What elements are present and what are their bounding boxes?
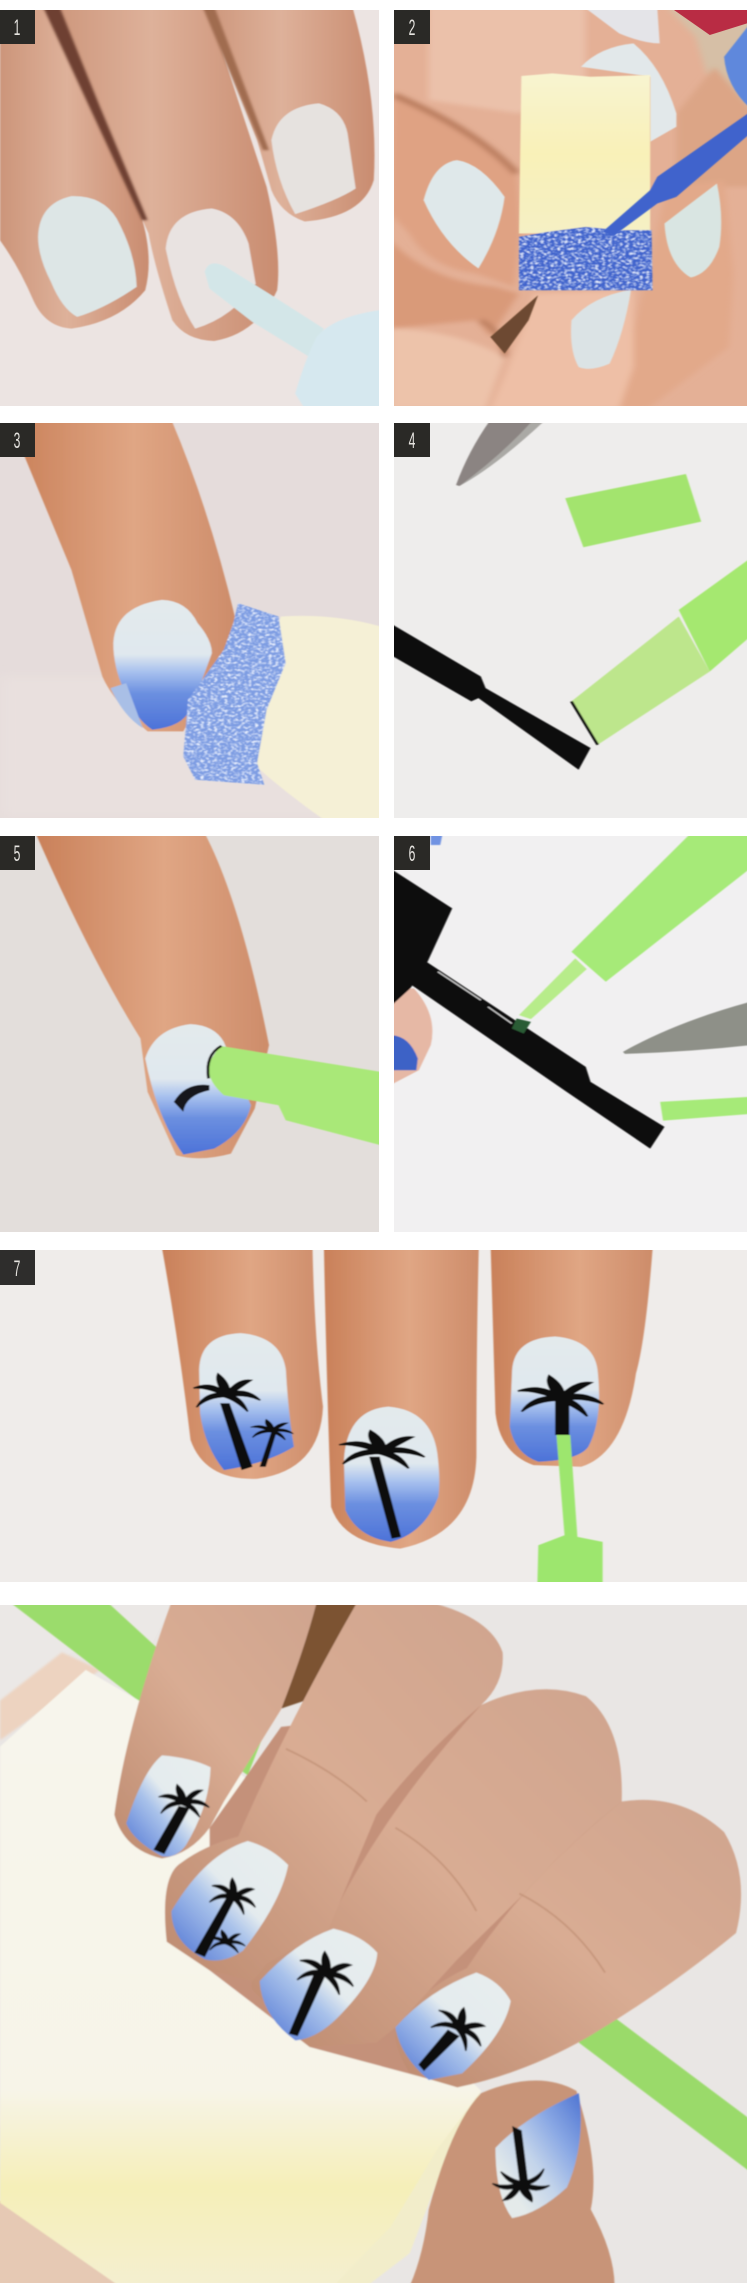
finger creases — [286, 1749, 605, 1973]
badge: 7: 7 — [14, 1256, 20, 1281]
finger: pinky — [114, 1602, 317, 1858]
badge: 6: 6 — [409, 841, 415, 866]
finger — [36, 833, 269, 1158]
ring — [279, 1602, 362, 1709]
badge: 1 — [0, 10, 35, 44]
badge: 5: 5 — [14, 841, 20, 866]
polish mark — [174, 1085, 209, 1112]
nail: right — [271, 103, 356, 214]
nail: thumb with palm — [490, 2093, 581, 2218]
nails — [424, 8, 721, 369]
finger: left — [162, 1248, 323, 1479]
badge: 3 — [0, 423, 35, 457]
nail: pinky with palm — [126, 1755, 211, 1857]
thumb — [410, 2080, 615, 2283]
badge: 7 — [0, 1250, 35, 1285]
nail: index with palm — [395, 1973, 511, 2080]
sponge — [183, 603, 381, 820]
brush: blue polish — [602, 23, 747, 235]
straw cut piece — [660, 1097, 747, 1121]
badge: 2: 2 — [409, 15, 415, 40]
sponge — [0, 1670, 481, 2283]
nail: middle — [166, 209, 256, 329]
panel: step 1 — [0, 7, 381, 409]
straw — [571, 558, 747, 745]
black bottle — [390, 868, 452, 1007]
badge: 5 — [0, 836, 35, 870]
finger: middle — [324, 1248, 479, 1549]
nail: ombre — [145, 1024, 251, 1155]
panel: step 4 — [390, 420, 747, 818]
scissors — [456, 420, 545, 486]
nail: middle with palm — [339, 1407, 439, 1542]
green stick — [537, 1435, 603, 1584]
badge: 3: 3 — [14, 428, 20, 453]
nail: left — [38, 196, 137, 317]
finger — [10, 420, 236, 731]
straw — [519, 833, 747, 1019]
ring — [490, 295, 538, 354]
panel: step 6 — [390, 833, 747, 1232]
badge: 2 — [394, 10, 430, 44]
nail: left with palms — [194, 1333, 294, 1470]
finger: middle — [165, 1602, 503, 1981]
straw: lower — [579, 2003, 747, 2172]
brush: pale polish — [205, 263, 381, 409]
hand: palm behind the fingers — [210, 1705, 622, 2087]
panel: step 7 — [0, 1248, 747, 1584]
straw piece — [565, 474, 701, 547]
panel: final result — [0, 1602, 747, 2283]
finger: right — [491, 1248, 653, 1467]
nail: ombre — [113, 600, 212, 730]
badge: 1: 1 — [14, 15, 20, 40]
panel: step 2 — [390, 7, 747, 409]
black brush — [390, 623, 591, 770]
finger: ring — [252, 1689, 622, 2047]
panel: step 5 — [0, 833, 381, 1232]
panel: step 3 — [0, 420, 381, 820]
nail: right with palm — [510, 1337, 603, 1462]
badge: 4: 4 — [409, 428, 415, 453]
straw: upper — [10, 1602, 267, 1775]
sponge — [519, 73, 653, 290]
black brush — [404, 957, 664, 1149]
nail: ring with palms — [172, 1841, 288, 1960]
badge: 4 — [394, 423, 430, 457]
scissors — [623, 1002, 747, 1054]
nail: middle with palm — [260, 1929, 377, 2040]
finger: little — [394, 1800, 741, 2087]
finger and nail — [390, 833, 443, 1085]
green tube — [209, 1046, 381, 1145]
badge: 6 — [394, 836, 430, 870]
